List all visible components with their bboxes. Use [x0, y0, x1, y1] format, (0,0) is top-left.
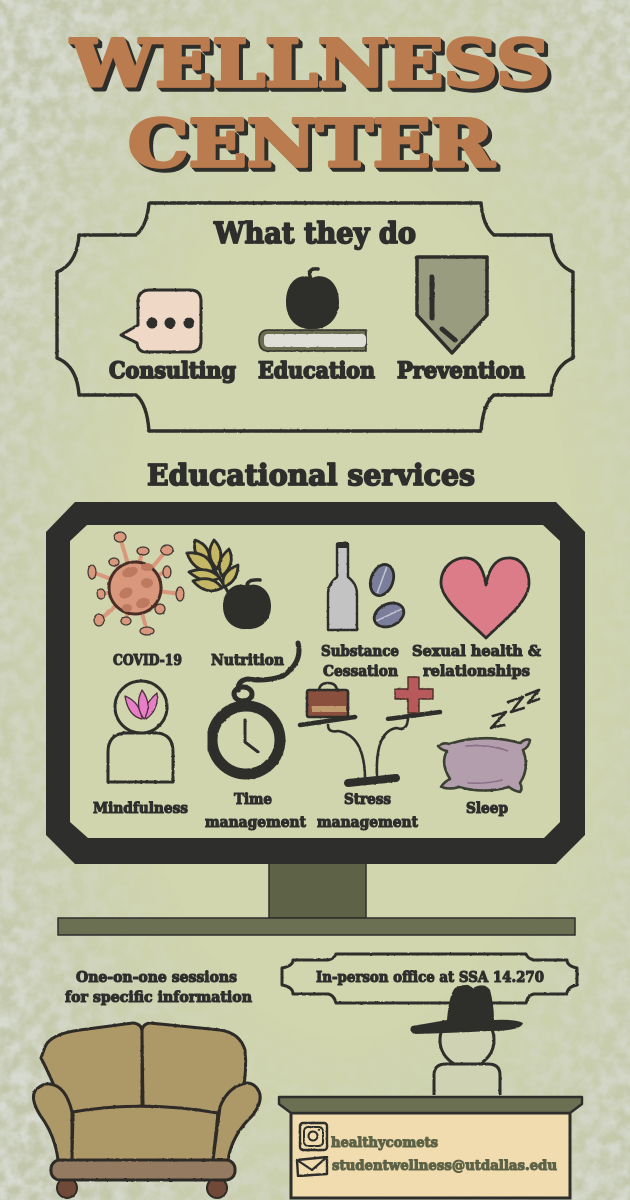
panel: monitor screen — [46, 502, 585, 864]
panel: office plaque — [282, 954, 577, 1003]
label: mindfulness: Mindfulness — [93, 800, 188, 817]
icon: shield — [417, 257, 487, 353]
icon: instagram — [300, 1123, 327, 1150]
label: prevention: Prevention — [397, 358, 525, 384]
icon: envelope — [297, 1157, 327, 1176]
label: nutrition: Nutrition — [211, 652, 284, 669]
icon: pocket watch — [212, 643, 299, 774]
icon: pillow and zzz — [438, 690, 539, 792]
label: email address: studentwellness@utdallas.edu — [332, 1158, 557, 1174]
label: education: Education — [258, 358, 375, 384]
label: consulting: Consulting — [109, 358, 236, 384]
label: time management: Time — [234, 791, 272, 808]
label: time management: management — [205, 814, 306, 831]
title: CENTER — [128, 106, 495, 182]
panel: what they do — [57, 203, 573, 431]
label: substance cessation — [321, 643, 399, 680]
label: stress management: management — [317, 814, 418, 831]
label: stress management — [317, 791, 418, 831]
text: one-on-one sessions — [65, 969, 252, 1006]
heading: educational services: Educational services — [147, 458, 475, 492]
label: instagram handle: healthycomets — [331, 1135, 438, 1151]
label: substance cessation: Substance — [321, 643, 399, 660]
text: one-on-one sessions: for specific information — [65, 989, 252, 1006]
label: stress management: Stress — [344, 791, 391, 808]
monitor stand — [58, 862, 575, 935]
label: sexual health and relationships: relationships — [423, 663, 530, 680]
label: covid-19: COVID-19 — [113, 652, 182, 669]
label: time management — [205, 791, 306, 831]
title: WELLNESS — [70, 26, 550, 102]
text: one-on-one sessions: One-on-one sessions — [76, 969, 237, 986]
icon: virus — [88, 532, 184, 635]
icon: bottle and pills — [328, 542, 408, 632]
heading: what they do: What they do — [213, 216, 416, 250]
label: sleep: Sleep — [466, 800, 508, 817]
icon: stress balance — [300, 677, 440, 783]
icon: wheat and apple — [187, 540, 271, 629]
icon: speech bubble — [121, 290, 201, 352]
label: sexual health and relationships: Sexual health & — [412, 643, 541, 660]
panel: desk — [279, 1097, 582, 1198]
label: substance cessation: Cessation — [323, 663, 398, 680]
icon: mindfulness person — [108, 681, 173, 782]
icon: apple on book — [259, 269, 366, 351]
icon: person with hat — [410, 985, 523, 1095]
icon: couch — [33, 1023, 260, 1198]
label: sexual health and relationships — [412, 643, 541, 680]
label: office location: In-person office at SSA 14.270 — [316, 969, 544, 986]
title — [70, 26, 550, 182]
icon: heart — [441, 558, 529, 638]
